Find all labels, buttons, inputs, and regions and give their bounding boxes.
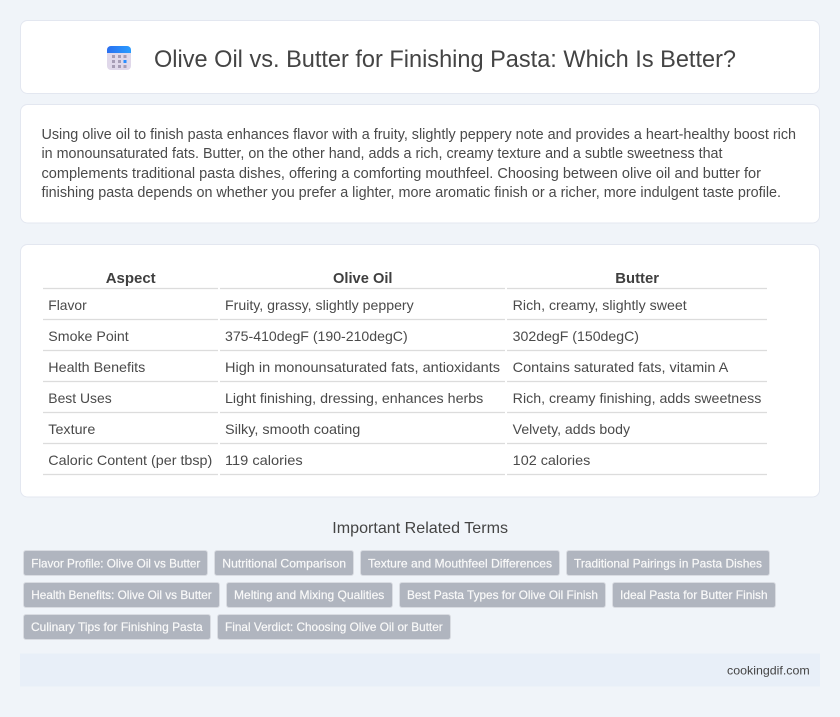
intro paragraph: finishing pasta depends on whether you prefer a lighter, more aromatic finish or a richer, more indulgent taste profile. [42, 185, 781, 201]
tags: related terms [24, 550, 776, 640]
tag: Texture and Mouthfeel Differences [368, 556, 552, 570]
row: flavor: Fruity, grassy, slightly peppery [225, 297, 414, 313]
row: smoke point: 375-410degF (190-210degC) [225, 328, 408, 344]
tag [400, 582, 606, 608]
row: best uses: Rich, creamy finishing, adds sweetness [513, 390, 761, 406]
row: best uses: Best Uses [48, 390, 112, 406]
panel: comparison table [20, 244, 820, 497]
tag: Traditional Pairings in Pasta Dishes [574, 556, 762, 570]
row: smoke point: 302degF (150degC) [513, 328, 639, 344]
tag [226, 582, 392, 608]
row: caloric content [48, 452, 590, 468]
row: health benefits: High in monounsaturated fats, antioxidants [225, 359, 500, 375]
row: texture: Velvety, adds body [513, 421, 630, 437]
title: Olive Oil vs. Butter for Finishing Pasta: Which Is Better? [154, 46, 736, 73]
tag: Ideal Pasta for Butter Finish [620, 588, 768, 602]
panel: introduction [20, 104, 820, 223]
row: flavor: Flavor [48, 297, 87, 313]
intro paragraph [42, 127, 796, 201]
tag: Final Verdict: Choosing Olive Oil or Butter [225, 620, 443, 634]
table header row: Aspect [106, 270, 156, 287]
panel: header [20, 20, 820, 94]
tag [214, 550, 354, 576]
row: caloric content: 119 calories [225, 452, 303, 468]
tag: Best Pasta Types for Olive Oil Finish [407, 588, 598, 602]
tag [612, 582, 776, 608]
row: smoke point [48, 328, 639, 344]
row: best uses [48, 390, 761, 406]
tag: Culinary Tips for Finishing Pasta [31, 620, 203, 634]
intro paragraph: Using olive oil to finish pasta enhances flavor with a fruity, slightly peppery note and provides a heart-healthy boost rich [42, 127, 796, 143]
row: health benefits [48, 359, 729, 375]
tag [24, 614, 210, 640]
intro paragraph: in monounsaturated fats. Butter, on the other hand, adds a rich, creamy texture and a subtle sweetness that [42, 146, 722, 162]
tag [24, 582, 220, 608]
tag [24, 550, 208, 576]
tag: Health Benefits: Olive Oil vs Butter [31, 588, 212, 602]
table header row: Olive Oil [333, 270, 392, 287]
footer source: cookingdif.com [727, 664, 810, 678]
tag: Nutritional Comparison [222, 556, 346, 570]
row: texture: Silky, smooth coating [225, 421, 360, 437]
footer [20, 654, 820, 686]
row: health benefits: Contains saturated fats, vitamin A [513, 359, 729, 375]
intro paragraph: complements traditional pasta dishes, offering a comforting mouthfeel. Choosing between olive oil and butter for [42, 166, 761, 182]
icon: calendar [107, 46, 131, 70]
tag [218, 614, 450, 640]
row: caloric content: 102 calories [513, 452, 590, 468]
tag [360, 550, 560, 576]
heading: important related terms: Important Related Terms [332, 520, 508, 537]
table header row: Butter [615, 270, 659, 287]
row: flavor [48, 297, 687, 313]
row: flavor: Rich, creamy, slightly sweet [513, 297, 687, 313]
tag: Flavor Profile: Olive Oil vs Butter [31, 556, 200, 570]
tag [566, 550, 770, 576]
row: caloric content: Caloric Content (per tbsp) [48, 452, 212, 468]
row: best uses: Light finishing, dressing, enhances herbs [225, 390, 483, 406]
table header row [106, 270, 659, 287]
row: smoke point: Smoke Point [48, 328, 129, 344]
tag: Melting and Mixing Qualities [234, 588, 384, 602]
row: texture: Texture [48, 421, 96, 437]
row: health benefits: Health Benefits [48, 359, 145, 375]
row: texture [48, 421, 630, 437]
